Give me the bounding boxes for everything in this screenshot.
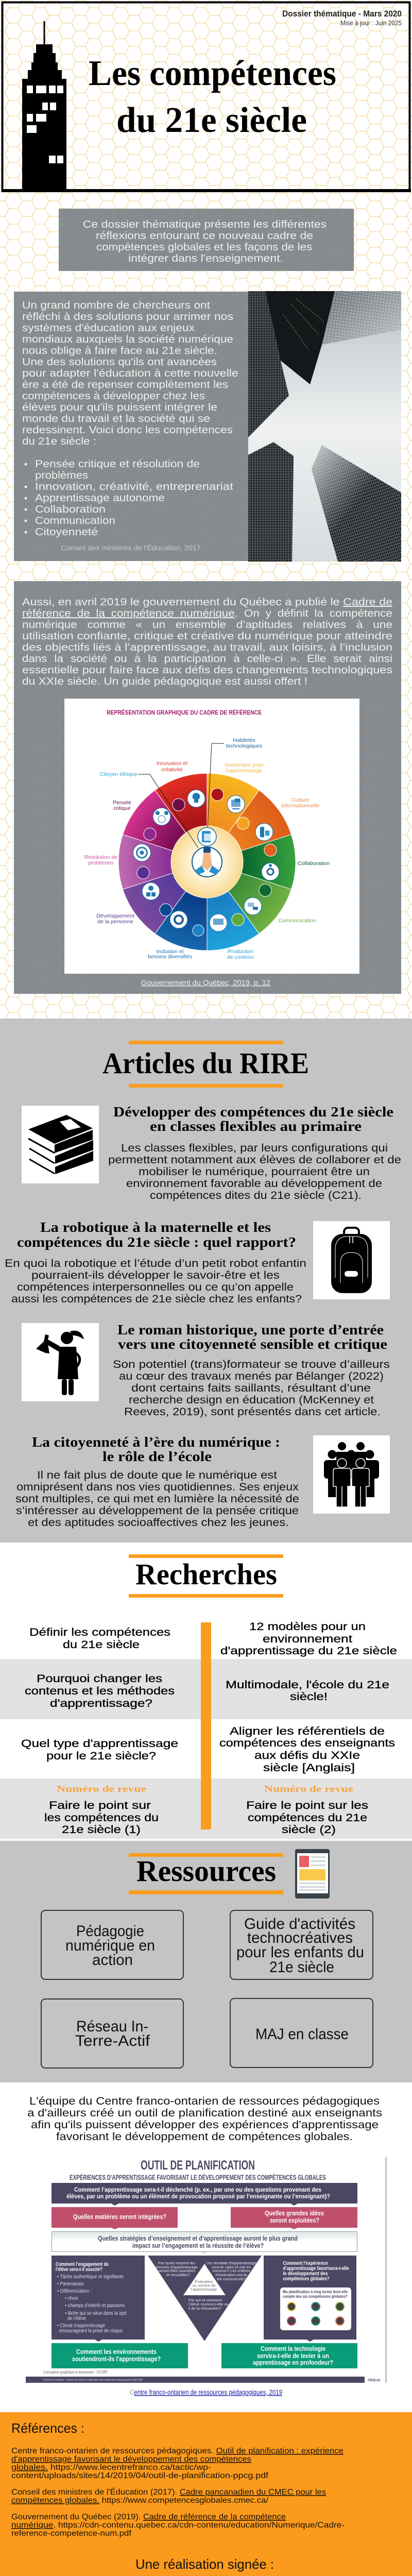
icon: backpack: [313, 1221, 390, 1299]
strategies box: Quelles stratégies d’enseignement et d’apprentissage auront le plus grand: [98, 2234, 298, 2242]
assessment triangle: Par qui et comment: [188, 2298, 222, 2302]
global competencies panel: Comment l’expérience: [283, 2261, 328, 2266]
article 2: compétences du 21e siècle : quel rapport?: [17, 1234, 296, 1250]
global competencies panel: d’apprentissage favorisera-t-elle: [283, 2266, 349, 2272]
research list: left column: Définir les compétences: [29, 1626, 170, 1638]
button: Réseau In-Terre-Actif: Terre-Actif: [75, 2032, 150, 2049]
subjects box: Quelles matières seront intégrées?: [73, 2213, 166, 2221]
framework text: utilisation confiante, critique et créative du numérique pour atteindre: [22, 631, 392, 642]
reference 1: content/uploads/sites/14/2019/04/outil-de-planification-ppcg.pdf: [11, 2471, 269, 2480]
wheel labels: Développement: [96, 913, 134, 919]
research list: right column: Faire le point sur les: [246, 1800, 368, 1811]
competency list: Communication: [35, 515, 115, 527]
research list: left column: Numéro de revue: [57, 1784, 146, 1794]
big ideas box: [231, 2207, 357, 2229]
header panel: [2, 2, 411, 192]
assessment triangle: d’évaluation ont-ils: [215, 2273, 247, 2277]
assessment triangle: preuves d’apprentissage: [156, 2265, 198, 2269]
assessment triangle: et recueillies?: [166, 2273, 190, 2277]
issue date: Mise à jour : Juin 2025: [340, 19, 402, 27]
article 4: et des aptitudes socioaffectives chez les jeunes.: [28, 1517, 289, 1529]
title: [89, 54, 336, 140]
intro panel: réflexions entourant ce nouveau cadre de: [96, 230, 313, 242]
trigger box: [52, 2183, 357, 2206]
wheel labels: de la personne: [97, 919, 133, 925]
article 2: En quoi la robotique et l’étude d’un petit robot enfantin: [5, 1258, 306, 1269]
engagement panel: • Différenciation :: [57, 2289, 92, 2294]
reference 3: reference-competence-num.pdf: [11, 2529, 132, 2538]
competency list: Pensée critique et résolution de: [35, 459, 200, 470]
article 1: Les classes flexibles, par leurs configurations qui: [121, 1142, 388, 1154]
puzzle knobs: [137, 788, 277, 936]
wheel sectors: [118, 773, 296, 951]
section: Ressources: [0, 1841, 412, 2082]
article 4: sont multiples, ce qui met en lumière la nécessité de: [15, 1493, 299, 1505]
reference 2: compétences globales. https://www.competencesglobales.cmec.ca/: [11, 2496, 269, 2505]
credit bar: Recherche et rédaction : Johanne Ste-Croix en collaboration avec l’équipe d’accompagnement du @CFORP: [43, 2379, 143, 2382]
heading: Recherches: Recherches: [135, 1557, 277, 1591]
big ideas box: Quelles grandes idées: [265, 2209, 324, 2217]
article 1: compétences dites du 21e siècle (C21).: [150, 1190, 362, 1201]
button: Pédagogie numérique en action: numérique en: [65, 1937, 155, 1954]
assessment triangle: il de la rétroaction?: [188, 2306, 221, 2311]
wheel labels: Pensée: [113, 800, 131, 806]
planning tool caption: Centre franco-ontarien de ressources pédagogiques, 2019: [130, 2388, 282, 2396]
article 4: omniprésent dans nos vies quotidiennes. Ses enjeux: [16, 1481, 299, 1493]
framework text: [22, 597, 392, 687]
button: Guide d'activités: pour les enfants du: [236, 1944, 364, 1961]
icon: group of people: [313, 1435, 390, 1514]
assessment triangle: été coconstruits?: [217, 2277, 246, 2281]
technology box: Comment la technologie: [261, 2345, 325, 2352]
panel: researchers text: du 21e siècle :: [22, 436, 96, 447]
research list: right column: Aligner les référentiels de: [230, 1725, 385, 1737]
section: Recherches: [0, 1543, 412, 1841]
reference 1: Centre franco-ontarien de ressources pédagogiques. Outil de planification : expérience: [11, 2447, 344, 2455]
big ideas box: seront exploitées?: [270, 2216, 319, 2224]
reference 1: [11, 2447, 344, 2480]
research list: left column: du 21e siècle: [63, 1639, 140, 1651]
panel: researchers text: Un grand nombre de chercheurs ont: [22, 300, 210, 311]
framework text: dans la société ou à la participation à celle-ci ». Elle serait ainsi: [22, 653, 392, 665]
button: Pédagogie numérique en action: Pédagogie: [76, 1923, 144, 1940]
technology box: apprentissage en profondeur?: [253, 2359, 333, 2366]
global competencies panel: compétences globales?: [283, 2276, 330, 2282]
global competencies panel: [264, 2256, 356, 2342]
environments box: [52, 2343, 188, 2368]
article 4: [15, 1434, 390, 1529]
technology box: servira-t-elle de levier à un: [257, 2352, 329, 2360]
research list: right column: siècle (2): [282, 1824, 336, 1836]
assessment triangle: l’élève recevra-t-elle ou: [188, 2302, 229, 2307]
framework text: Aussi, en avril 2019 le gouvernement du Québec a publié le Cadre de: [22, 597, 392, 608]
leader lines: [138, 743, 224, 848]
button: Guide d'activités: Guide d'activités: [244, 1916, 355, 1933]
panel: researchers text: [14, 292, 248, 561]
hub: [171, 826, 243, 898]
engagement panel: l’élève sera-t-il suscité?: [56, 2267, 102, 2273]
button: Réseau In-Terre-Actif: [41, 1999, 183, 2068]
research list: right column: siècle [Anglais]: [263, 1762, 355, 1774]
wheel labels: Citoyen éthique: [100, 771, 138, 777]
reference 2: Conseil des ministres de l'Éducation (2017). Cadre pancanadien du CMEC pour les: [11, 2488, 326, 2497]
issue date: [282, 9, 402, 27]
wheel labels: technologiques: [226, 743, 262, 749]
credit bar: [26, 2370, 380, 2383]
intro panel: [59, 209, 354, 271]
research list: right column: siècle!: [290, 1691, 328, 1703]
subjects box: [52, 2207, 178, 2229]
trigger box: élèves, par un problème ou un élément de provocation proposé par l’enseignante ou l’enseignant)?: [66, 2194, 330, 2200]
wheel labels: l'apprentissage: [226, 768, 262, 774]
assessment triangle: [148, 2256, 262, 2341]
panel: researchers text: compétences à développer chez les: [22, 391, 205, 402]
research list: right column: [219, 1621, 397, 1836]
icon: skyscraper: [22, 21, 66, 192]
wheel labels: Collaboration: [298, 860, 330, 867]
article 1: en classes flexibles au primaire: [150, 1118, 362, 1134]
global competencies panel: compte des six compétences globales?: [283, 2294, 348, 2299]
article 3: Reeves, 2019), sont présentés dans cet article.: [124, 1406, 381, 1418]
framework text: du XXIe siècle. Un guide pédagogique est aussi offert !: [22, 676, 307, 687]
engagement panel: • Tâche authentique et signifiante: [57, 2274, 124, 2280]
research list: right column: compétences des enseignants: [219, 1737, 395, 1749]
engagement panel: • Partenariats: [57, 2281, 84, 2287]
article 3: dont certains faits saillants, résultant d’une: [131, 1382, 371, 1394]
reference 3: Gouvernement du Québec (2019). Cadre de référence de la compétence: [11, 2513, 286, 2521]
article 4: s’intéresser au développement de la pensée critique: [16, 1505, 299, 1517]
panel: researchers text: réfléchi à des solutions pour arrimer nos: [22, 311, 233, 323]
global competencies panel: le développement des: [283, 2271, 328, 2277]
engagement panel: • choix: [65, 2296, 78, 2301]
article 2: compétences interpersonnelles ou ce qu’on appelle: [17, 1281, 294, 1293]
competency list: Innovation, créativité, entreprenariat: [35, 481, 234, 493]
section: planning tool: [0, 2082, 412, 2412]
assessment triangle: au service de: [193, 2283, 215, 2287]
assessment triangle: sont-ils clairs et mis en: [212, 2265, 251, 2269]
wheel labels: critique: [113, 805, 131, 811]
central divider bar: [201, 1622, 211, 1829]
planning tool intro text: a d'ailleurs créé un outil de planification destiné aux enseignants: [27, 2107, 382, 2119]
research list: right column: d'apprentissage du 21e siècle: [220, 1645, 397, 1657]
research list: left column: [21, 1626, 178, 1836]
title: du 21e siècle: [116, 100, 307, 140]
research list: right column: Multimodale, l'école du 21e: [226, 1679, 389, 1691]
environments box: soutiendront-ils l’apprentissage?: [72, 2355, 161, 2363]
article 2: pourraient-ils développer le savoir-être et les: [31, 1269, 280, 1281]
intro panel: intégrer dans l'enseignement.: [128, 253, 283, 264]
competency list: [25, 459, 234, 538]
heading: Références: Références :: [11, 2420, 84, 2436]
research list: left column: Faire le point sur: [49, 1800, 151, 1811]
button: Guide d'activités: 21e siècle: [269, 1959, 334, 1976]
heading: Articles du RIRE: [102, 1041, 309, 1088]
wheel labels: [84, 737, 330, 960]
engagement panel: [52, 2256, 145, 2342]
panel: researchers text: monde du travail et la société qui se: [22, 413, 210, 425]
button: Pédagogie numérique en action: action: [92, 1952, 133, 1969]
button: MAJ en classe: [230, 1998, 373, 2067]
assessment triangle: Évaluation: [195, 2279, 213, 2284]
trigger box: Comment l’apprentissage sera-t-il déclenché (p. ex., par une ou des questions provenant des: [74, 2187, 321, 2193]
heading: Ressources: Ressources: [136, 1854, 276, 1888]
credit bar: cforp.ca: [368, 2378, 380, 2382]
icon: girl with flask: [22, 1323, 99, 1401]
research list: left column: 21e siècle (1): [62, 1824, 141, 1836]
strategies box: impact sur l’engagement et la réussite de l’élève?: [132, 2242, 264, 2249]
article 1: [22, 1104, 401, 1201]
panel: researchers text: nous oblige à faire face au 21e siècle.: [22, 345, 217, 357]
panel: researchers text: pour adapter l'éducation à cette nouvelle: [22, 368, 238, 379]
credit bar: Conception graphique et impression : CFORP: [43, 2370, 108, 2375]
article 2: La robotique à la maternelle et les: [40, 1219, 271, 1235]
article 3: [22, 1322, 390, 1418]
reference 3: numérique . https://cdn-contenu.quebec.ca/cdn-contenu/education/Numerique/Cadre-: [11, 2521, 345, 2530]
engagement panel: de l’élève: [67, 2316, 86, 2321]
button: Pédagogie numérique en action: [41, 1910, 183, 1979]
engagement panel: • champs d’intérêt et passions: [65, 2303, 125, 2309]
wheel labels: Numérique pour: [225, 762, 264, 768]
research list: right column: 12 modèles pour un: [249, 1621, 366, 1633]
diagram: planning tool: [26, 2157, 386, 2383]
article 2: aussi les compétences de 21e siècle chez les enfants?: [11, 1293, 302, 1305]
intro panel: Ce dossier thématique présente les différentes: [83, 219, 327, 230]
source: Conseil des ministres de l'Éducation, 2017: [61, 544, 201, 552]
assessment triangle: l’apprentissage: [191, 2287, 217, 2292]
diagram: planning tool: OUTIL DE PLANIFICATION: [141, 2158, 255, 2173]
article 2: [5, 1219, 390, 1305]
framework text: des objectifs liés à l’apprentissage, au travail, aux loisirs, à l’inclusion: [22, 642, 392, 653]
environments box: Comment les environnements: [76, 2348, 157, 2355]
photo: skyscrapers in fog: [248, 291, 401, 562]
panel: researchers text: Une des solutions qu'ils ont avancées: [22, 357, 217, 368]
competency list: problèmes: [35, 470, 88, 481]
planning tool intro text: favorisant le développement de compétences globales.: [56, 2131, 353, 2143]
button: Guide d'activités: technocréatives: [247, 1929, 353, 1946]
strategies box: [52, 2232, 357, 2253]
wheel labels: problèmes: [88, 860, 114, 866]
competency icons: [133, 790, 279, 931]
framework text: référence de la compétence numérique . On y définit la compétence: [22, 608, 392, 619]
heading: Articles du RIRE: Articles du RIRE: [102, 1046, 309, 1080]
competency list: Collaboration: [35, 504, 106, 515]
research list: left column: Quel type d'apprentissage: [21, 1738, 178, 1750]
engagement panel: Comment l’engagement de: [56, 2262, 109, 2267]
article 4: Il ne fait plus de doute que le numérique est: [37, 1469, 277, 1481]
chart: puzzle wheel of the framework: [64, 699, 359, 974]
wheel labels: créativité: [161, 767, 183, 773]
section: references: [0, 2412, 412, 2576]
article 3: Le roman historique, une porte d’entrée: [117, 1322, 384, 1337]
planning tool intro text: L'équipe du Centre franco-ontarien de ressources pédagogiques: [29, 2095, 380, 2107]
engagement panel: • tâche qui se situe dans la zpd: [65, 2311, 126, 2316]
assessment triangle: Par quels moyens les: [158, 2261, 195, 2265]
panel: digital competency framework: [14, 581, 401, 994]
wheel labels: besoins diversifiés: [148, 954, 192, 960]
wheel labels: informationnelle: [281, 803, 319, 809]
article 1: environnement favorable au développement de: [126, 1178, 382, 1190]
issue date: Dossier thématique - Mars 2020: [282, 9, 402, 19]
panel: researchers text: élèves pour qu'ils puissent intégrer le: [22, 402, 217, 413]
article 4: La citoyenneté à l’ère du numérique :: [32, 1434, 280, 1450]
reference 1: globales. https://www.lecentrefranco.ca/tactic/wp-: [11, 2463, 211, 2472]
panel: researchers text: systèmes d'éducation aux enjeux: [22, 323, 195, 334]
competency markers: [287, 2302, 344, 2325]
assessment triangle: Les résultats d’apprentissage: [206, 2261, 256, 2265]
panel: researchers text: redessinent. Voici donc les compétences: [22, 425, 233, 436]
assessment triangle: seront-elles suscitées: [158, 2268, 195, 2273]
wheel labels: Communication: [279, 918, 316, 924]
image credit: Gouvernement du Québec, 2019, p. 12: [141, 978, 270, 987]
wheel labels: Production: [228, 948, 253, 955]
framework text: numérique comme « un ensemble d’aptitudes relatives à une: [22, 619, 392, 631]
wheel labels: Résolution de: [84, 854, 117, 860]
research list: right column: environnement: [263, 1633, 352, 1645]
row shading: [0, 1659, 412, 1839]
article 3: au cœur des travaux menés par Bélanger (2022): [119, 1370, 384, 1382]
chart: puzzle wheel of the framework: REPRÉSENTATION GRAPHIQUE DU CADRE DE RÉFÉRENCE: [107, 708, 262, 716]
research list: right column: Numéro de revue: [264, 1784, 353, 1794]
research list: left column: pour le 21e siècle?: [46, 1750, 156, 1762]
wheel labels: Inclusion et: [156, 948, 184, 955]
article 3: Son potentiel (trans)formateur se trouve d’ailleurs: [113, 1359, 390, 1370]
research list: left column: les compétences du: [44, 1812, 159, 1824]
research list: left column: contenus et les méthodes: [25, 1685, 175, 1697]
assessment triangle: commun? Les critères: [212, 2268, 250, 2273]
research list: left column: Pourquoi changer les: [37, 1673, 162, 1685]
wheel labels: Innovation et: [157, 760, 187, 767]
panel: researchers text: ère a été de repenser complètement les: [22, 379, 228, 391]
reference 1: d'apprentissage favorisant le développement des compétences: [11, 2455, 251, 2464]
article 3: vers une citoyenneté sensible et critique: [118, 1336, 387, 1352]
research list: right column: aux défis du XXIe: [254, 1750, 360, 1761]
wheel labels: de contenu: [227, 954, 254, 960]
icon: books: [22, 1106, 99, 1183]
title: Les compétences: [89, 54, 336, 93]
competency list: Citoyenneté: [35, 527, 98, 538]
button: Guide d'activités: [230, 1910, 373, 1979]
engagement panel: encourageant la prise de risque: [59, 2328, 123, 2334]
research list: left column: d'apprentissage?: [50, 1698, 152, 1709]
intro panel: compétences globales et les façons de les: [96, 242, 312, 253]
wheel labels: Culture: [291, 797, 309, 803]
reference 3: [11, 2513, 345, 2538]
planning tool intro text: afin qu'ils puissent développer des expériences d'apprentissage: [31, 2119, 379, 2131]
button: Réseau In-Terre-Actif: Réseau In-: [76, 2018, 148, 2035]
article 3: recherche design en éducation (McKenney et: [129, 1394, 374, 1406]
heading: credits: Une réalisation signée :: [135, 2556, 274, 2572]
global competencies panel: Ma planification à long terme tient-elle: [283, 2290, 348, 2294]
reference 2: [11, 2488, 326, 2505]
competency list: Apprentissage autonome: [35, 493, 165, 504]
research list: right column: compétences du 21e: [248, 1812, 367, 1824]
engagement panel: • Climat d’apprentissage: [57, 2323, 105, 2329]
article 1: permettent notamment aux élèves de collaborer et de: [108, 1154, 401, 1166]
button: MAJ en classe: MAJ en classe: [255, 2026, 349, 2043]
icon: tablet: [295, 1849, 330, 1899]
article 1: Développer des compétences du 21e siècle: [113, 1104, 393, 1120]
article 4: le rôle de l’école: [102, 1449, 212, 1464]
framework text: essentielle pour faire face aux défis des changements technologiques: [22, 665, 392, 676]
technology box: [221, 2343, 357, 2368]
planning tool intro text: [27, 2095, 382, 2143]
section: Articles du RIRE: [0, 1019, 412, 1543]
article 1: mobiliser le numérique, pourraient être un: [139, 1166, 370, 1178]
panel: researchers text: mondiaux auxquels la société numérique: [22, 334, 233, 345]
wheel labels: Habiletés: [233, 737, 255, 743]
